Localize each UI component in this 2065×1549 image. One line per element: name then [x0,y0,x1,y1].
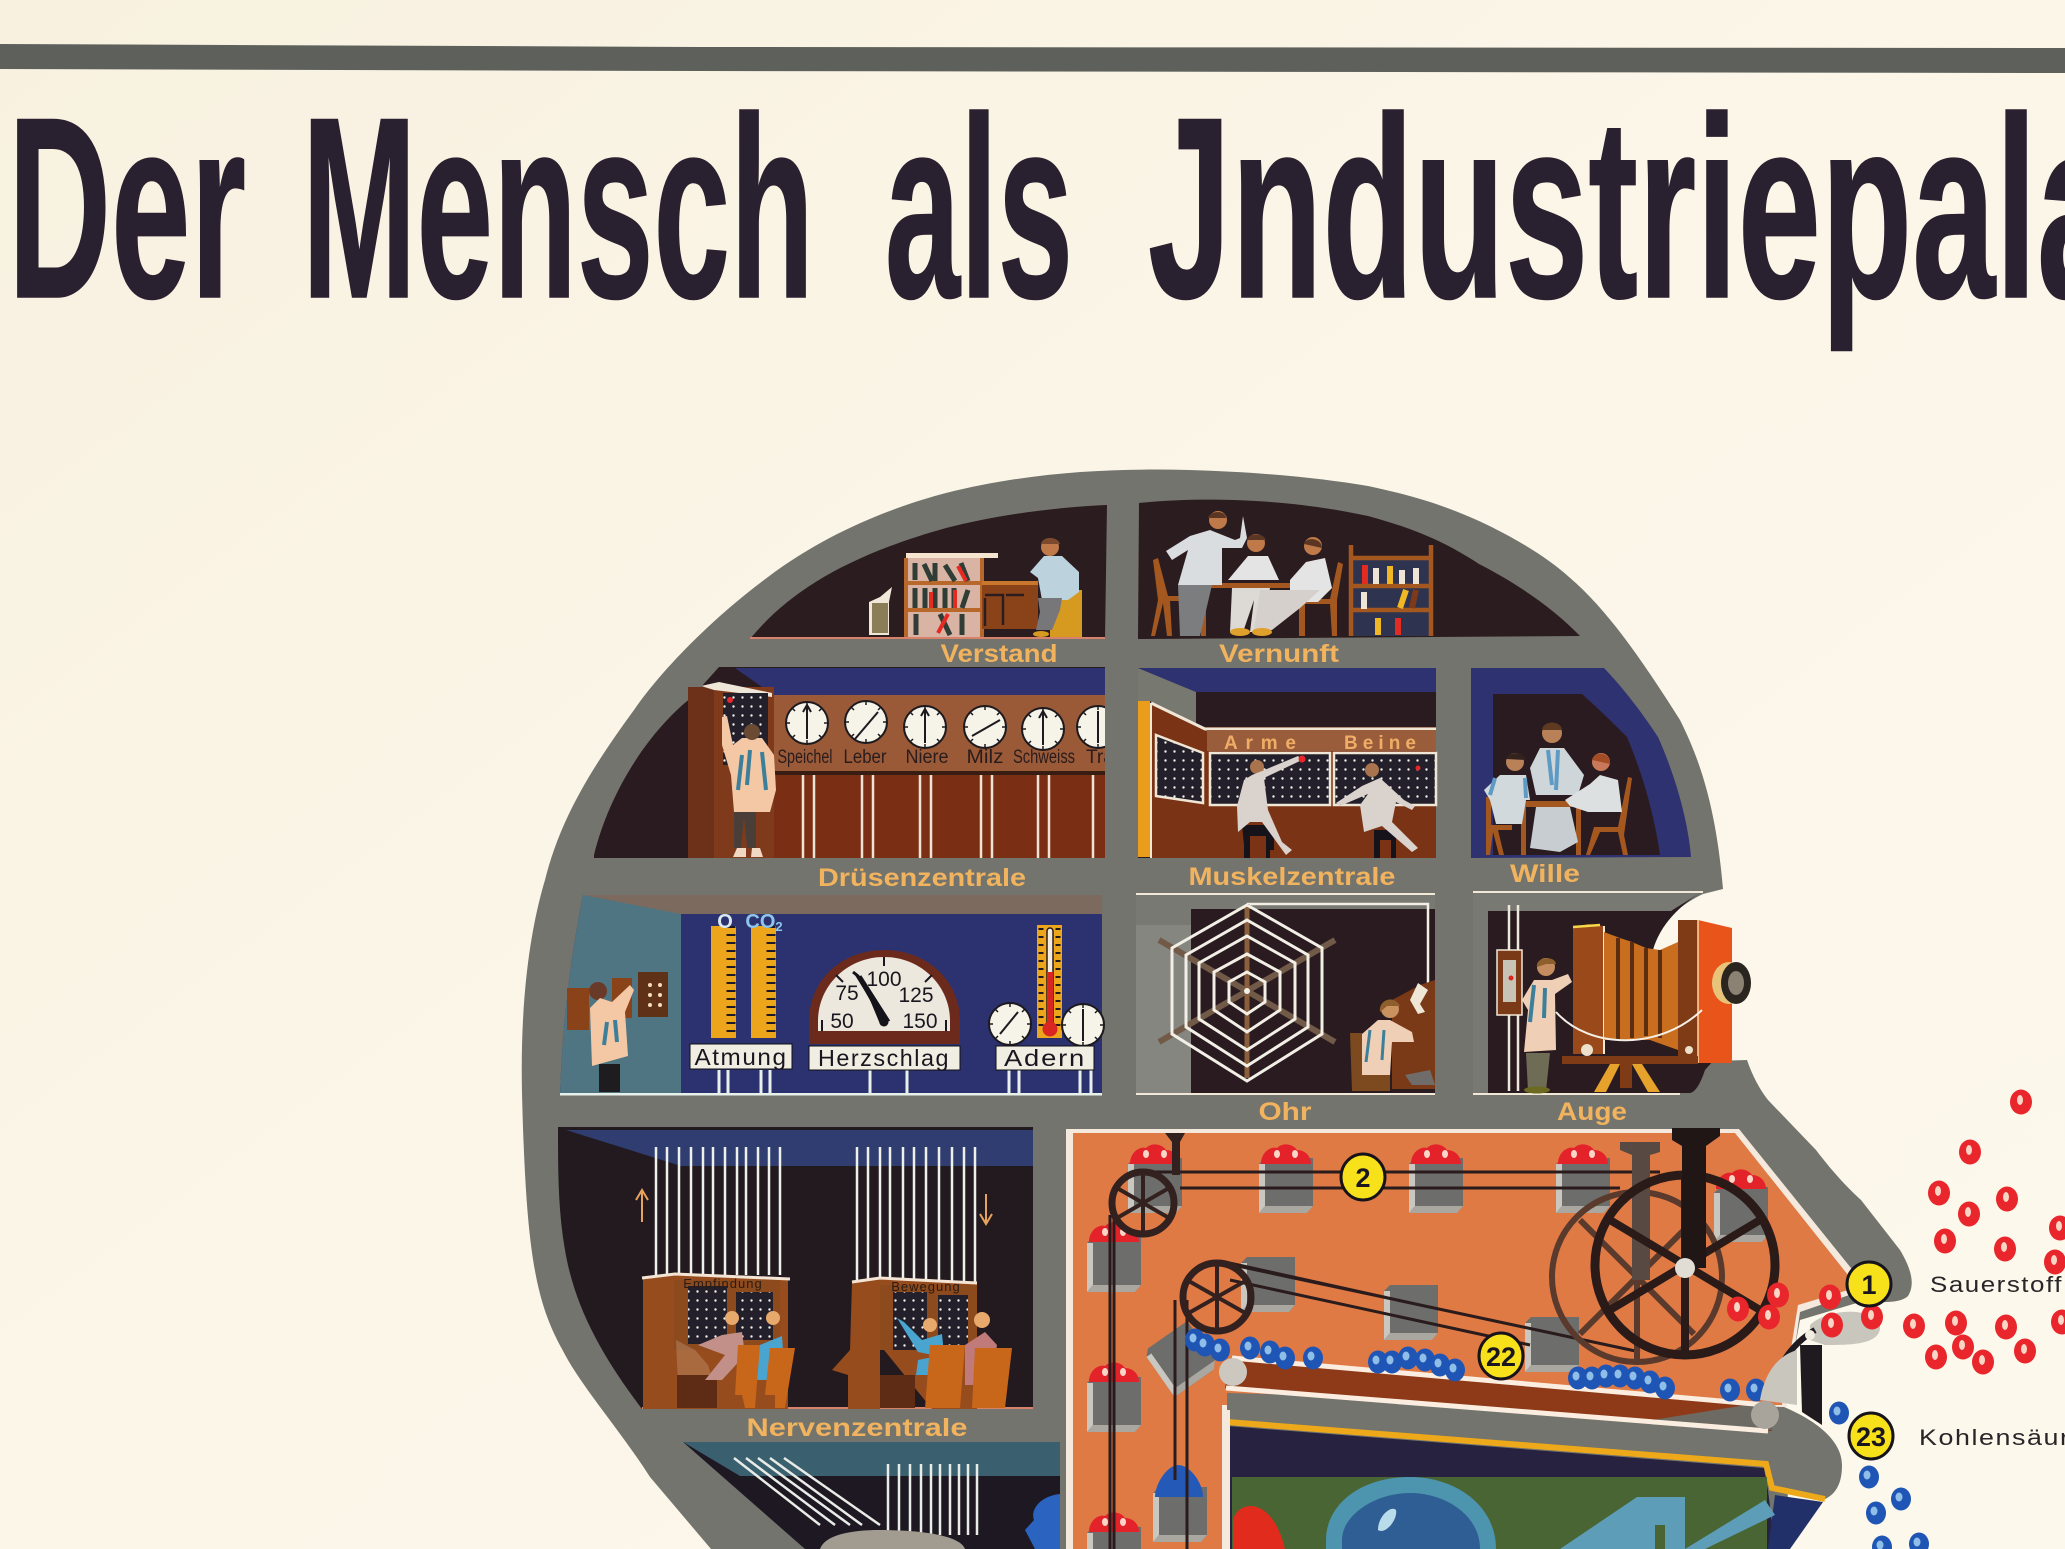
panel: Ohr room [1136,894,1435,1095]
wheel: rear large [1552,1192,1722,1362]
panel: orange lung room [1066,1128,1858,1549]
sign: Herzschlag: Herzschlag [818,1045,950,1071]
thermometer [1037,925,1062,1038]
gauge: Herzschlag: 150 [902,1010,938,1033]
panel: Drüsenzentrale room [594,667,1135,858]
banner captions [1224,733,1416,754]
desk: Empfindung [642,1274,790,1409]
person: operator pink right [965,1312,997,1385]
person: standing debater [1166,511,1247,636]
wheel: small lower [1183,1263,1251,1331]
panel: Verstand room [750,505,1107,639]
ceiling [735,668,1105,697]
callout: 1 Sauerstoff [1847,1262,2063,1306]
title: Der [8,63,246,352]
clock captions: Schweiss [1013,747,1075,768]
person: thinker [1030,538,1082,637]
wheel: small upper [1112,1172,1174,1234]
machine frame [1560,1497,1775,1549]
callout: 22: 22 [1486,1342,1516,1372]
wheel: front large [1595,1175,1775,1355]
callout: 1 Sauerstoff: Sauerstoff [1930,1272,2063,1297]
desk: Empfindung: Empfindung [683,1276,763,1291]
gauge: Herzschlag: 125 [898,984,934,1007]
panel: Atmung and Herzschlag room [560,895,1104,1096]
sign legs [719,1070,1091,1093]
label: Nervenzentrale: Nervenzentrale [746,1414,968,1442]
panel: Auge room [1473,891,1751,1094]
clock captions: Milz [966,747,1004,768]
clock captions [778,747,1135,768]
control box [1497,950,1522,1015]
person: technician [589,982,634,1092]
chairs [735,1345,795,1408]
icon: spider web [1159,904,1335,1081]
lip housing [1227,1393,1842,1500]
icon: bookshelf [1351,545,1431,636]
arrow down [980,1194,992,1224]
columns O and CO2: CO [745,911,775,933]
panel: Wille room [1471,668,1691,858]
sign: Adern: Adern [1004,1045,1086,1071]
label: Wille: Wille [1510,860,1580,888]
top rule bar [0,44,2065,73]
panel: Nervenzentrale room [558,1127,1033,1409]
blue carbon dioxide balls [1829,1402,1929,1549]
conveyor belt [1219,1358,1779,1431]
label: Drüsenzentrale: Drüsenzentrale [818,864,1026,892]
wheel stand [1672,1128,1720,1268]
person: seated man right [1252,537,1332,636]
person: camera operator [1522,958,1572,1094]
gauge: Herzschlag: 100 [866,968,902,991]
panel: Muskelzentrale room [1138,668,1436,858]
label: Vernunft: Vernunft [1219,640,1340,668]
panel: Vernunft room [1138,500,1580,639]
chairs [925,1345,1012,1408]
gauge: Herzschlag [809,950,960,1044]
desk: Bewegung [832,1278,977,1409]
label: Muskelzentrale: Muskelzentrale [1188,863,1396,891]
vertical nerve wires [888,1464,977,1535]
panel: lower brain room [683,1442,1060,1549]
clocks [786,701,1119,750]
columns O and CO2: 2 [775,919,783,934]
clock captions: Niere [906,747,948,768]
person: telephonist [1362,999,1414,1075]
gauge: Herzschlag: 75 [835,982,859,1005]
person: operator right [1336,763,1418,858]
banner captions: Beine [1344,733,1416,754]
label: Ohr: Ohr [1258,1098,1312,1126]
belts [1110,1172,1660,1549]
person: operator blue reaching [897,1318,946,1375]
icon: waste basket [869,587,892,635]
nostril intake [1760,1312,1880,1425]
title [8,63,2065,353]
callout: 22 [1479,1333,1523,1379]
empty blocks [1143,1257,1579,1542]
title: als [885,63,1073,352]
person: operator blue [750,1311,785,1380]
telephone desk [1350,980,1435,1091]
head silhouette [522,470,1912,1549]
person: standing leader [1530,722,1584,852]
label: Verstand: Verstand [940,640,1058,668]
callout: 2: 2 [1355,1163,1371,1193]
banner captions: Arme [1224,733,1296,754]
chairs and table [1486,777,1632,855]
columns O and CO2: O [717,911,733,933]
desk: Bewegung: Bewegung [891,1279,961,1294]
title: Mensch [302,63,814,352]
clock captions: Speichel [778,747,832,768]
icon: desk [982,581,1038,629]
person: seated man [1228,534,1279,636]
icon: camera lens [1712,962,1751,1004]
dome [820,1530,965,1549]
callout: 23 Kohlensäure: Kohlensäure [1919,1425,2065,1450]
callout: 2 [1341,1154,1385,1200]
person: operator pink [698,1311,745,1380]
red oxygen balls [1727,1090,2065,1374]
person: seated right [1565,753,1622,812]
switchboard tower [688,682,774,858]
gauge: Herzschlag: 50 [830,1010,854,1033]
blocks with red balls [1087,1144,1768,1549]
icon: red pipe [1233,1506,1285,1549]
icon: table with chairs [1151,558,1343,636]
banner [1207,730,1436,751]
columns O and CO2 [711,911,783,1038]
callout: 23 Kohlensäure [1849,1413,2065,1459]
nerve wires up [656,1147,780,1275]
clock captions: Leber [844,747,887,768]
sign: Atmung: Atmung [694,1044,788,1070]
icon: blue dome [1326,1477,1496,1549]
callout: 1 Sauerstoff: 1 [1861,1270,1877,1300]
switch boxes [567,972,668,1030]
clocks [989,1003,1104,1046]
label: Auge: Auge [1557,1098,1627,1126]
pillars [803,775,1093,858]
arrow up [636,1190,648,1222]
person: seated left [1484,753,1530,824]
blue device [1025,1494,1060,1549]
person: operator left [1237,756,1306,858]
blue balls on belt [1185,1328,1766,1402]
icon: bookshelf [906,553,998,637]
diagonal nerve wires [734,1458,880,1525]
switch panels [1156,735,1436,805]
icon: bellows camera [1556,920,1732,1092]
panel: boiler room [1222,1410,1825,1549]
callout: 23 Kohlensäure: 23 [1856,1422,1886,1452]
person: operator at board [722,716,776,857]
clock captions: Träne [1086,747,1135,768]
nerve wires down [857,1147,975,1283]
